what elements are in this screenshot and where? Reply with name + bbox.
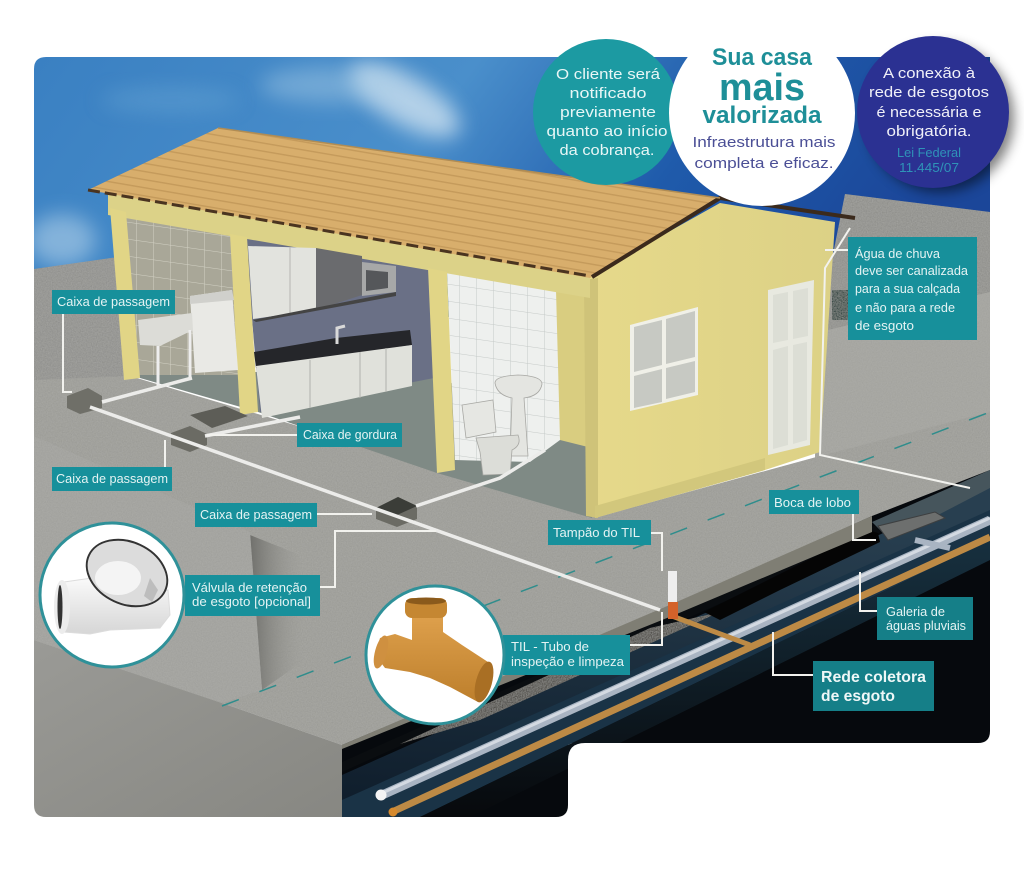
title: mais	[719, 67, 805, 109]
beam	[108, 188, 590, 298]
bathroom wall end	[556, 292, 586, 446]
label: Água de chuva	[848, 237, 977, 340]
tiled wall: laundry	[125, 212, 238, 375]
label: Água de chuva: de esgoto	[855, 319, 914, 333]
subtitle	[692, 135, 836, 172]
label: Caixa de passagem, lower: Caixa de passagem	[200, 508, 312, 522]
walls: boundary walls	[34, 194, 990, 465]
label: Caixa de passagem, top	[52, 290, 175, 314]
kitchen counter	[254, 326, 412, 418]
label: Água de chuva: Água de chuva	[855, 246, 940, 261]
label: Rede coletora de esgoto: de esgoto	[821, 688, 895, 705]
label: Válvula de retenção: de esgoto [opcional]	[192, 595, 311, 609]
label: Tampão do TIL	[548, 520, 651, 545]
title: Sua casa	[712, 44, 813, 71]
circle: legal requirement	[857, 36, 1009, 188]
label: Caixa de passagem, middle	[52, 467, 172, 491]
circle: notice	[533, 39, 679, 185]
house	[67, 128, 855, 619]
product: check valve	[40, 523, 184, 667]
wall: lower left retaining wall	[34, 535, 262, 703]
circle: legal requirement: rede de esgotos	[869, 85, 989, 101]
circle: notice: O cliente será	[556, 67, 661, 83]
TIL riser	[668, 571, 678, 619]
shadow of blue circle	[866, 44, 1014, 192]
side wall face	[586, 203, 835, 518]
circle: headline	[669, 20, 855, 206]
label: Caixa de passagem, lower	[195, 503, 317, 527]
pipes: main lines	[376, 518, 990, 816]
circle: notice: da cobrança.	[560, 143, 654, 159]
label: Caixa de passagem, top: Caixa de passagem	[57, 295, 170, 309]
circle: legal requirement: 11.445/07	[899, 161, 959, 175]
label: TIL: TIL - Tubo de	[511, 640, 589, 654]
label: Água de chuva: deve ser canalizada	[855, 264, 968, 278]
label: TIL	[503, 635, 630, 675]
label: Caixa de gordura: Caixa de gordura	[303, 428, 397, 442]
label: Galeria de águas pluviais: águas pluviais	[886, 619, 966, 633]
circle: legal requirement: Lei Federal	[897, 146, 961, 160]
label: Válvula de retenção	[185, 575, 320, 616]
curb face	[342, 516, 872, 749]
ground: lot surface	[34, 376, 990, 745]
laundry: washer and sink	[138, 290, 238, 386]
valve body	[64, 578, 170, 634]
label: TIL: inspeção e limpeza	[511, 655, 624, 669]
subtitle: completa e eficaz.	[694, 156, 834, 172]
label: Galeria de águas pluviais: Galeria de	[886, 605, 945, 619]
label: Rede coletora de esgoto	[813, 661, 934, 711]
bathroom fixtures	[462, 375, 542, 475]
leader lines	[63, 228, 970, 675]
label: Boca de lobo: Boca de lobo	[774, 496, 851, 510]
sky	[28, 48, 990, 317]
label: Água de chuva: e não para a rede	[855, 301, 955, 315]
label: Válvula de retenção: Válvula de retenção	[192, 581, 307, 595]
circle: legal requirement: A conexão à	[883, 66, 976, 82]
title: valorizada	[702, 102, 822, 129]
tiled wall: bathroom	[447, 272, 560, 462]
underground section	[342, 470, 990, 817]
label: Galeria de águas pluviais	[877, 597, 973, 640]
label: Boca de lobo	[769, 490, 859, 514]
subtitle: Infraestrutura mais	[692, 135, 836, 151]
kitchen back wall	[245, 238, 434, 412]
circle: legal requirement: obrigatória.	[886, 124, 972, 140]
lower left cut face	[34, 640, 342, 817]
roof	[88, 128, 855, 278]
small white house pipes	[90, 378, 660, 610]
black pocket under curb	[704, 530, 880, 620]
interior floor	[125, 372, 592, 518]
circle: legal requirement: é necessária e	[876, 105, 982, 121]
window	[630, 307, 698, 411]
storm drain grate	[878, 512, 945, 540]
label: Caixa de gordura	[297, 423, 402, 447]
circle: notice: previamente	[560, 105, 656, 121]
label: Água de chuva: para a sua calçada	[855, 282, 960, 296]
label: Rede coletora de esgoto: Rede coletora	[821, 669, 926, 686]
dashed property line	[222, 412, 990, 706]
circle: notice: quanto ao início	[546, 124, 668, 140]
columns	[110, 208, 140, 380]
door	[768, 280, 814, 455]
asphalt speckle	[400, 612, 720, 744]
label: Caixa de passagem, middle: Caixa de passagem	[56, 472, 168, 486]
kitchen upper cabinets	[248, 246, 396, 322]
yard boxes	[67, 388, 417, 527]
title	[702, 44, 822, 129]
ground: shadow strip beside retaining wall	[250, 535, 288, 690]
road edge near storm drain	[872, 470, 990, 540]
product: TIL fitting	[366, 586, 504, 724]
circle: notice: notificado	[570, 86, 646, 102]
label: Tampão do TIL: Tampão do TIL	[553, 526, 640, 540]
